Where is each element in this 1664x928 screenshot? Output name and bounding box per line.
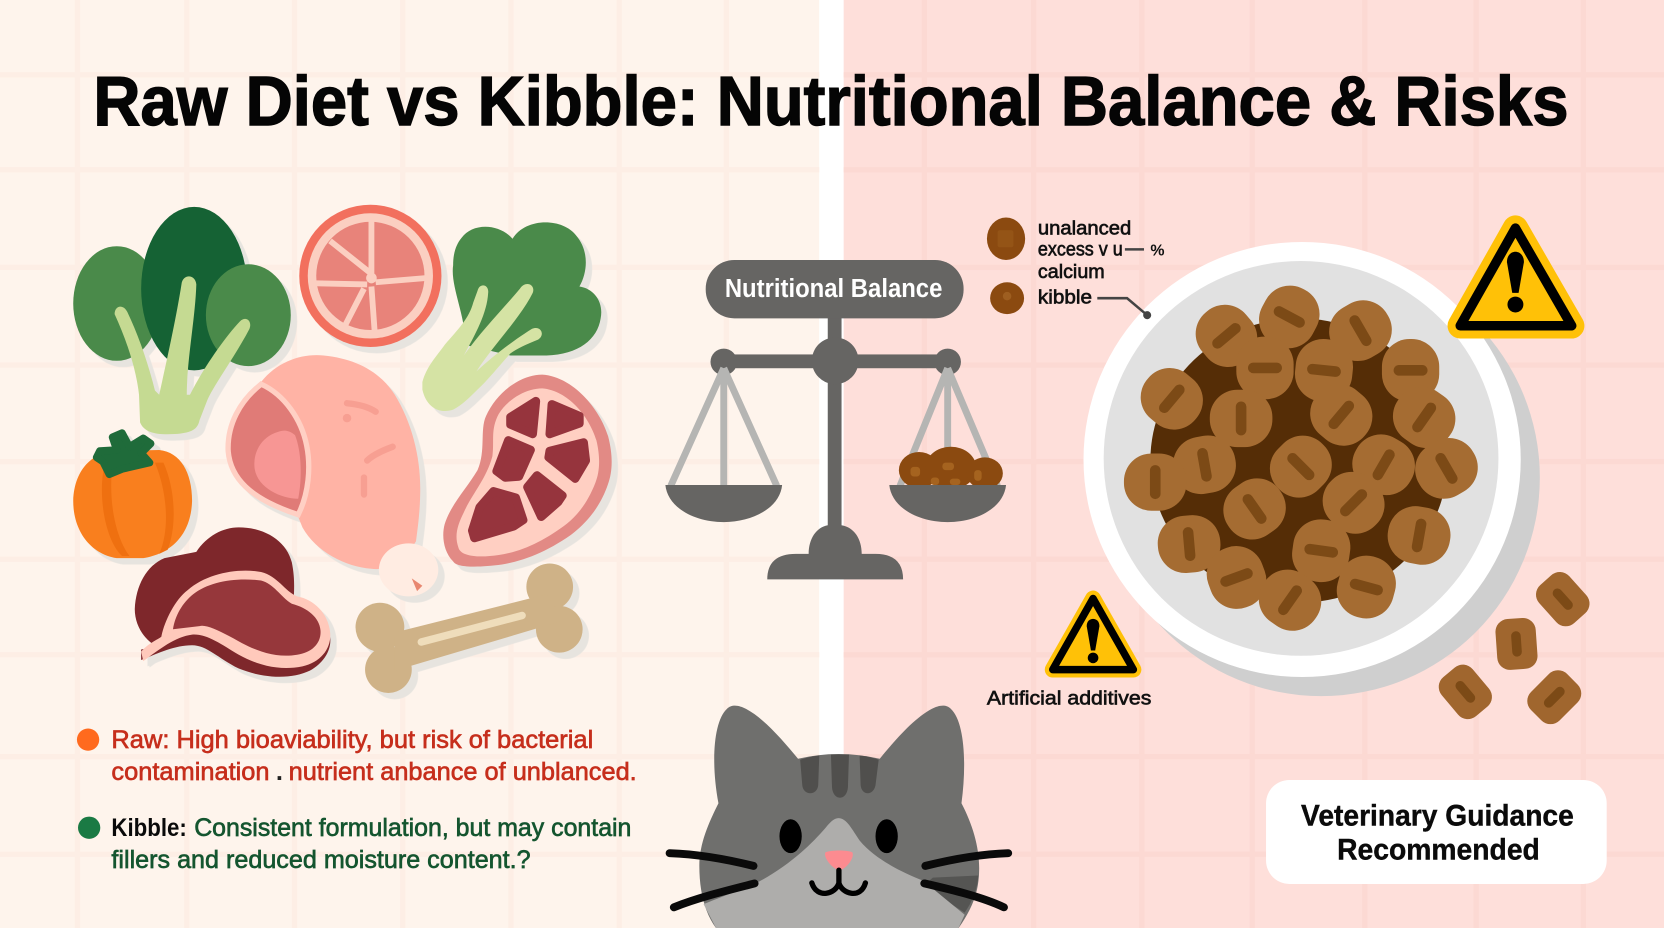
cat stripes <box>800 754 879 798</box>
cat muzzle <box>704 818 965 928</box>
food base <box>1150 318 1448 603</box>
title: Raw Diet vs Kibble: Nutritional Balance & Risks <box>93 62 1568 140</box>
bowl rim <box>1084 242 1521 677</box>
icon: broccoli left <box>73 207 291 434</box>
legend text: kibble <box>1038 287 1092 308</box>
cat cheek patch <box>923 875 978 913</box>
kibble note <box>78 814 631 874</box>
label pill <box>706 260 964 318</box>
kibble bowl <box>1084 242 1540 696</box>
cat eyes <box>779 819 898 853</box>
text block: raw vs kibble notes <box>77 726 637 874</box>
panel: raw food illustrations <box>73 205 612 693</box>
callout: veterinary guidance: Veterinary Guidance <box>1301 800 1574 833</box>
raw note <box>77 726 637 786</box>
raw note: Raw: High bioaviability, but risk of bacterial <box>111 726 593 754</box>
icon: broccoli right <box>422 222 601 411</box>
legend text: unalanced <box>1038 219 1131 240</box>
legend text <box>1038 219 1165 308</box>
cat whiskers <box>670 853 1008 907</box>
leader lines <box>1097 249 1150 318</box>
kibble note: Consistent formulation, but may contain <box>194 814 631 842</box>
callout: veterinary guidance: Recommended <box>1337 834 1540 867</box>
scale beam <box>710 337 961 384</box>
icon: citrus meat slice <box>299 205 441 347</box>
balance scale <box>665 260 1006 579</box>
icon: liver cut <box>135 527 330 677</box>
scale pole and base <box>767 316 903 579</box>
legend text: excess v u <box>1038 240 1123 261</box>
callout: veterinary guidance <box>1266 780 1607 884</box>
bowl inner <box>1104 261 1498 656</box>
icon: chicken drumstick <box>228 355 438 596</box>
right pan with kibble <box>889 368 1006 522</box>
legend callouts <box>987 218 1165 318</box>
icon: t-bone steak <box>443 375 612 567</box>
kibble note: Kibble: <box>111 814 187 842</box>
cat nose <box>825 851 853 870</box>
raw note: . <box>276 758 283 786</box>
cat mouth <box>812 870 865 893</box>
icon: bone <box>356 563 583 693</box>
bowl shadow <box>1103 259 1540 696</box>
icon: small warning sign <box>1053 599 1133 670</box>
raw note: contamination <box>111 758 270 786</box>
icon: large warning sign <box>1460 228 1572 326</box>
legend text: % <box>1150 243 1165 260</box>
icon: pumpkin <box>73 433 192 558</box>
left pan <box>665 368 782 522</box>
label pill: Nutritional Balance <box>725 275 942 303</box>
legend text: calcium <box>1038 262 1105 283</box>
kibble note: fillers and reduced moisture content.? <box>111 846 531 874</box>
kibble pieces <box>1124 276 1488 642</box>
icon: cat face <box>670 706 1008 928</box>
label: artificial additives: Artificial additives <box>987 688 1152 710</box>
icon: kibble blob large <box>987 218 1025 260</box>
scattered kibble <box>1434 567 1595 729</box>
raw note: nutrient anbance of unblanced. <box>289 758 637 786</box>
icon: kibble blob small <box>990 282 1024 314</box>
